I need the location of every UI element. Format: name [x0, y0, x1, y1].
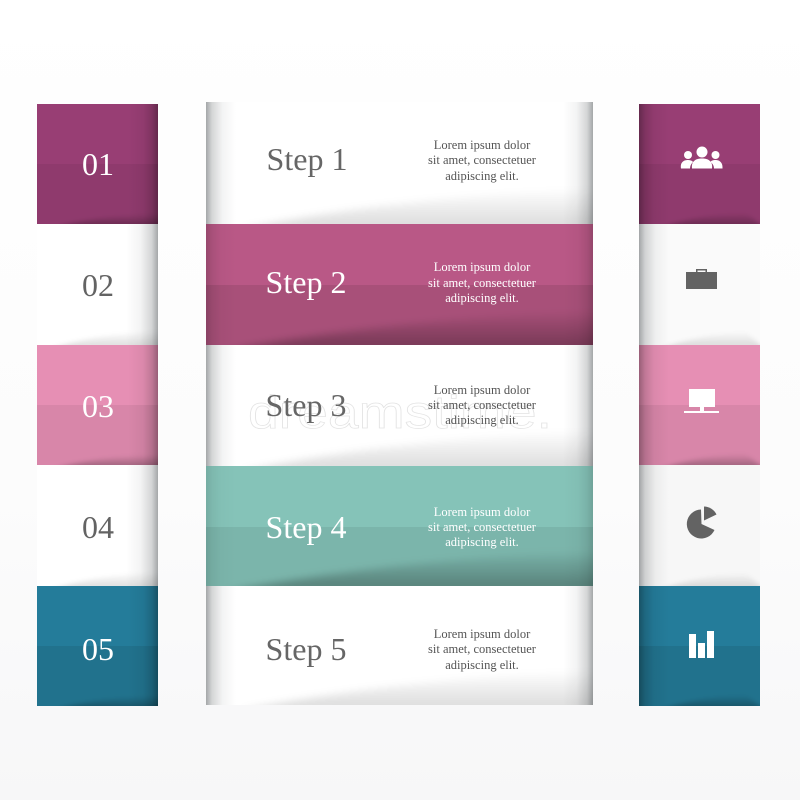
icon: monitor: [684, 389, 719, 413]
tab 04: [56, 465, 158, 586]
step 3 description: Lorem ipsum dolor: [434, 383, 531, 397]
step 2 band: [206, 224, 610, 351]
step 3 band: [206, 345, 610, 472]
icon: briefcase: [686, 269, 717, 289]
step 4 title: Step 4: [266, 509, 346, 545]
step 3 title: Step 3: [266, 387, 346, 423]
step 1 description: Lorem ipsum dolor: [434, 138, 531, 152]
tab 01: 01: [82, 146, 114, 182]
tab 02: [56, 224, 158, 345]
step 2 description: sit amet, consectetuer: [428, 276, 537, 290]
centre column: step bands: [206, 102, 610, 711]
step 2 title: Step 2: [266, 264, 346, 300]
step 1 description: sit amet, consectetuer: [428, 153, 537, 167]
step 2 description: Lorem ipsum dolor: [434, 260, 531, 274]
icon tab 5: [639, 586, 765, 710]
step 5 title: Step 5: [266, 631, 346, 667]
left column: numbered tabs: [37, 104, 165, 710]
step 5 description: sit amet, consectetuer: [428, 642, 537, 656]
step 4 description: Lorem ipsum dolor: [434, 505, 531, 519]
tab 05: 05: [82, 631, 114, 667]
icon: bar chart: [689, 631, 714, 658]
step 4 description: adipiscing elit.: [445, 535, 519, 549]
icon tab 1: [639, 104, 765, 228]
step 3 description: sit amet, consectetuer: [428, 398, 537, 412]
tab 01: [37, 104, 165, 228]
step 5 band: [206, 586, 610, 711]
step 5 description: adipiscing elit.: [445, 658, 519, 672]
icon tab 2: [639, 224, 765, 349]
watermark: dreamstime.: [248, 386, 552, 438]
tab 05: [37, 586, 165, 710]
step 4 description: sit amet, consectetuer: [428, 520, 537, 534]
step 5 description: Lorem ipsum dolor: [434, 627, 531, 641]
tab 02: 02: [82, 267, 114, 303]
step 1 description: adipiscing elit.: [445, 169, 519, 183]
tab 03: 03: [82, 388, 114, 424]
icon tab 4: [639, 465, 765, 590]
tab 04: 04: [82, 509, 114, 545]
step 4 band: [206, 466, 610, 592]
icon tab 3: [639, 345, 765, 469]
step 2 description: adipiscing elit.: [445, 291, 519, 305]
icon: pie chart: [687, 506, 716, 538]
step 1 title: Step 1: [267, 141, 347, 177]
step 1 band: [206, 102, 610, 230]
right column: icon tabs: [639, 104, 765, 710]
tab 03: [37, 345, 165, 469]
step 3 description: adipiscing elit.: [445, 413, 519, 427]
icon: team: [681, 146, 723, 168]
